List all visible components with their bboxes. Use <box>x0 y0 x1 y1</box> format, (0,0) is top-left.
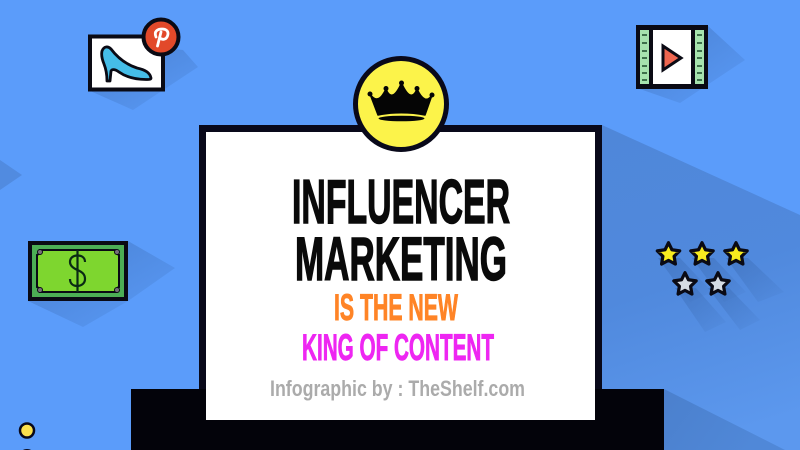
icon: shoe photo with Pinterest badge <box>88 20 198 110</box>
bill outer frame <box>30 243 126 299</box>
film perforations <box>642 35 702 80</box>
left sprocket strip <box>640 30 649 84</box>
gold star 2 <box>691 243 713 264</box>
bill inner panel <box>37 250 119 292</box>
Pinterest badge <box>144 20 178 54</box>
decorative yellow dot <box>20 424 34 438</box>
crown jewels <box>368 80 434 98</box>
left edge shadow <box>0 160 22 190</box>
base long shadow <box>664 389 785 450</box>
panel: title card <box>199 128 602 428</box>
grey star 4 <box>674 273 696 294</box>
icon: dollar bill <box>28 241 175 327</box>
card long shadow <box>602 125 800 450</box>
card frame lower edge <box>199 389 602 428</box>
gold star 1 <box>657 243 680 264</box>
credit line: Infographic by : TheShelf.com <box>270 376 525 401</box>
badge circle <box>356 58 446 150</box>
icon: high heel shoe <box>102 47 151 81</box>
shoe icon shadow <box>88 48 198 110</box>
subheading: is the new: IS THE NEW <box>334 287 458 328</box>
crown base band <box>378 116 424 121</box>
icon: crown badge <box>356 58 446 150</box>
right sprocket strip <box>695 30 704 84</box>
card frame <box>202 128 598 424</box>
photo frame <box>90 36 163 90</box>
film center frame <box>653 30 691 84</box>
grey star 5 <box>707 273 729 294</box>
subheading: king of content: KING OF CONTENT <box>302 327 494 368</box>
heading: Influencer: INFLUENCER <box>292 168 510 237</box>
star shadows <box>658 258 784 332</box>
heading: Marketing: MARKETING <box>295 225 507 293</box>
dollar sign <box>70 250 85 292</box>
Pinterest P glyph <box>155 29 168 46</box>
film frame <box>636 25 708 89</box>
play triangle <box>663 46 681 70</box>
film icon shadow <box>637 26 745 103</box>
icon: video film strip <box>636 25 745 103</box>
icon: star rating <box>657 243 784 332</box>
bill corner rivets <box>38 250 120 292</box>
black base block <box>131 389 664 450</box>
gold star 3 <box>725 243 747 264</box>
bill icon shadow <box>28 241 175 327</box>
crown body <box>370 83 432 115</box>
